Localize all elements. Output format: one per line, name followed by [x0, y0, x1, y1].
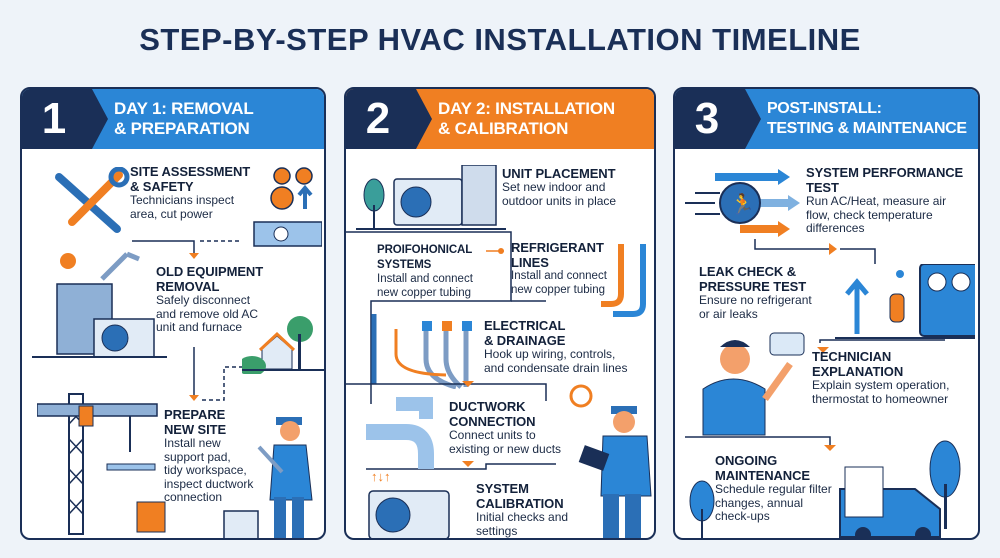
step: ongoing maintenance: MAINTENANCE	[715, 468, 810, 483]
step: old equipment removal: REMOVAL	[156, 279, 219, 294]
step: refrigerant lines: LINES	[511, 255, 549, 270]
step: system calibration: SYSTEM	[476, 481, 529, 496]
icon: technician explaining	[702, 332, 804, 436]
header: day 2: 2	[366, 94, 390, 143]
icon: house & trees	[242, 316, 324, 374]
step: unit placement: UNIT PLACEMENT	[502, 166, 615, 181]
step: leak check	[699, 264, 812, 320]
step: technician explanation: EXPLANATION	[812, 364, 903, 379]
step: old equipment removal: Safely disconnect	[156, 293, 250, 307]
step: refrigerant lines: Install and connect	[511, 270, 607, 282]
step: site assessment: area, cut power	[130, 206, 213, 220]
step: refrigerant lines	[511, 240, 607, 296]
step: technician explanation: TECHNICIAN	[812, 349, 891, 364]
step: old equipment removal: and remove old AC	[156, 306, 258, 320]
step: site assessment: & SAFETY	[130, 179, 193, 194]
step: prepare new site: PREPARE	[164, 407, 225, 422]
step: ongoing maintenance	[715, 453, 832, 523]
icon: outdoor unit: ↑↓↑	[371, 469, 390, 484]
step: prepare new site: tidy workspace,	[164, 463, 247, 477]
step: technician explanation	[812, 349, 949, 406]
icon: copper pipes	[601, 244, 646, 317]
header: day 1: 1	[42, 94, 66, 143]
step: electrical & drainage: & DRAINAGE	[484, 333, 565, 348]
header: day 1: & PREPARATION	[114, 119, 250, 138]
step: unit placement: Set new indoor and	[502, 180, 605, 194]
step: technician explanation: thermostat to homeowner	[812, 392, 948, 406]
step: system calibration: settings	[476, 524, 517, 538]
header: post-install: 3	[695, 94, 719, 143]
icon: duct pipes	[366, 397, 434, 469]
step: proifohonical systems: SYSTEMS	[377, 259, 431, 271]
arrow connector 1	[132, 240, 239, 259]
arrow connector 2	[189, 347, 242, 401]
step: old equipment removal: unit and furnace	[156, 320, 242, 334]
step: electrical & drainage: ELECTRICAL	[484, 318, 565, 333]
step: ductwork connection: existing or new ducts	[449, 442, 561, 456]
header: day 2: & CALIBRATION	[438, 119, 568, 138]
step: technician explanation: Explain system operation,	[812, 378, 949, 392]
step: ongoing maintenance: check-ups	[715, 509, 770, 523]
title: STEP-BY-STEP HVAC INSTALLATION TIMELINE	[139, 22, 861, 57]
step: ongoing maintenance: Schedule regular filter	[715, 482, 832, 496]
connector 2	[685, 339, 945, 451]
step: system calibration: Initial checks and	[476, 510, 568, 524]
step: system calibration: CALIBRATION	[476, 496, 563, 511]
step: system performance test: TEST	[806, 180, 839, 195]
header: post-install: TESTING & MAINTENANCE	[767, 120, 967, 137]
step: site assessment	[130, 164, 250, 220]
step: ductwork connection: DUCTWORK	[449, 399, 525, 414]
step: leak check: or air leaks	[699, 306, 758, 320]
icon: technician with wrench	[258, 417, 313, 538]
step: prepare new site: support pad,	[164, 450, 231, 464]
header: day 1	[22, 89, 324, 149]
header: post-install	[675, 89, 978, 149]
header: day 1: DAY 1: REMOVAL	[114, 99, 254, 118]
step: system performance test: differences	[806, 221, 864, 235]
icon: performance arrows	[685, 169, 800, 237]
step: ductwork connection: CONNECTION	[449, 414, 535, 429]
step: system performance test	[806, 165, 963, 235]
icon: building	[223, 510, 259, 538]
step: prepare new site: Install new	[164, 436, 221, 450]
step: system performance test: flow, check temperature	[806, 208, 933, 222]
step: ductwork connection: Connect units to	[449, 428, 536, 442]
step: site assessment: Technicians inspect	[130, 193, 234, 207]
step: leak check: PRESSURE TEST	[699, 279, 806, 294]
icon: outdoor unit	[368, 469, 450, 538]
step: electrical & drainage: Hook up wiring, controls,	[484, 347, 615, 361]
step: prepare new site: connection	[164, 490, 222, 504]
icon: pressure gauge station	[835, 264, 975, 339]
panel: post-install	[673, 87, 980, 540]
step: site assessment: SITE ASSESSMENT	[130, 164, 250, 179]
icon: money	[253, 167, 322, 247]
panel: day 1	[20, 87, 326, 540]
icon: tree	[690, 480, 714, 538]
step: leak check: LEAK CHECK &	[699, 264, 796, 279]
step: system calibration	[476, 481, 568, 538]
icon: service van	[839, 440, 960, 538]
step: system performance test: Run AC/Heat, measure air	[806, 194, 946, 208]
icon: indoor/outdoor units	[356, 165, 506, 230]
step: proifohonical systems: new copper tubing	[377, 286, 471, 298]
step: proifohonical systems	[377, 244, 473, 298]
connector	[754, 239, 876, 264]
step: refrigerant lines: new copper tubing	[511, 284, 605, 296]
step: unit placement	[502, 166, 616, 208]
icon: crane	[37, 393, 166, 535]
header: day 2	[346, 89, 654, 149]
step: unit placement: outdoor units in place	[502, 194, 616, 208]
step: ongoing maintenance: changes, annual	[715, 496, 803, 510]
step: refrigerant lines: REFRIGERANT	[511, 240, 604, 255]
step: ductwork connection	[449, 399, 561, 456]
step: system performance test: SYSTEM PERFORMANCE	[806, 165, 963, 180]
connector lines	[346, 231, 546, 404]
connector lines 2	[346, 381, 556, 470]
icon: wiring	[372, 314, 472, 389]
step: old equipment removal: OLD EQUIPMENT	[156, 264, 263, 279]
step: electrical & drainage	[484, 318, 628, 374]
icon: performance arrows: 🏃	[730, 192, 755, 216]
step: old equipment removal	[156, 264, 264, 334]
step: prepare new site: NEW SITE	[164, 422, 226, 437]
step: leak check: Ensure no refrigerant	[699, 293, 812, 307]
icon: technician with tablet	[570, 384, 652, 538]
step: prepare new site	[164, 407, 254, 504]
step: electrical & drainage: and condensate drain lines	[484, 360, 627, 374]
icon: old equipment	[32, 252, 167, 358]
step: proifohonical systems: Install and connect	[377, 273, 473, 285]
step: ongoing maintenance: ONGOING	[715, 453, 777, 468]
icon: crossed wrenches	[55, 167, 130, 233]
step: proifohonical systems: PROIFOHONICAL	[377, 244, 472, 256]
panel: day 2	[344, 87, 656, 540]
header: day 2: DAY 2: INSTALLATION	[438, 99, 615, 118]
header: post-install: POST-INSTALL:	[767, 100, 882, 117]
step: prepare new site: inspect ductwork	[164, 476, 253, 490]
